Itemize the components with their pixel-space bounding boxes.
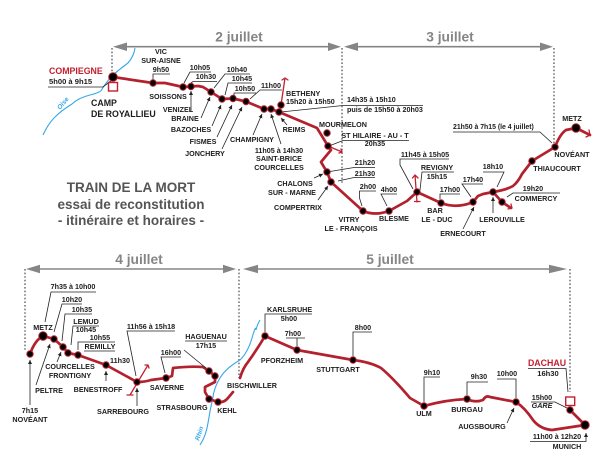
station: Fismes	[190, 95, 236, 146]
station: Augsbourg: 10h00	[497, 369, 517, 378]
station: Jonchery: JONCHERY	[185, 149, 225, 158]
station: Reims: 14h35 à 15h10	[347, 95, 396, 104]
station: Bénestroff: BENESTROFF	[74, 385, 123, 394]
station: Mourmelon	[319, 120, 367, 136]
station: Ernécourt: 17h40	[463, 175, 483, 184]
station: Châlons-sur-Marne: CHALONS	[277, 179, 313, 188]
station: Lérouville: 18h10	[483, 162, 503, 171]
station: Reims: REIMS	[283, 125, 306, 134]
station: Compertrix: COMPERTRIX	[274, 203, 322, 212]
station: Braine: BRAINE	[171, 114, 199, 123]
station: Haguenau	[184, 332, 227, 374]
station: Kehl: KEHL	[217, 406, 237, 415]
station: Burgau: 9h30	[471, 372, 487, 381]
station: Vic-sur-Aisne	[141, 47, 181, 86]
station: Thiaucourt: THIAUCOURT	[533, 164, 581, 173]
station: Compiègne	[48, 66, 117, 87]
camp de Royallieu: CAMP	[91, 98, 117, 108]
station: Lérouville: LEROUVILLE	[479, 215, 525, 224]
station: Remilly: REMILLY	[85, 342, 116, 351]
day arrow: 3 juillet: 3 juillet	[426, 30, 474, 44]
station: Vitry-le-François: 2h00	[360, 182, 376, 191]
station: Dachau gare: GARE	[532, 401, 553, 410]
station: Karlsruhe: KARLSRUHE	[267, 305, 312, 314]
station: Saverne	[150, 348, 184, 392]
station: Ulm: ULM	[416, 409, 432, 418]
station: Venizel: VENIZEL	[163, 105, 194, 114]
stop between Haguenau and Strasbourg	[212, 373, 218, 379]
day arrow: 2 juillet: 2 juillet	[215, 30, 263, 44]
station: Karlsruhe: 5h00	[281, 314, 297, 323]
station: Soissons	[149, 63, 211, 101]
station: Châlons-sur-Marne	[268, 158, 375, 197]
station: Lérouville	[479, 162, 525, 224]
station: Metz, 4 juillet: 7h35 à 10h00	[51, 282, 95, 291]
station: Blesme	[379, 185, 409, 223]
station: Remilly: 10h55	[90, 333, 110, 342]
station: Commercy: COMMERCY	[515, 194, 558, 203]
station: Stuttgart: STUTTGART	[316, 365, 360, 374]
station: Metz, 3 juillet	[562, 114, 590, 137]
station: Soissons: 10h05	[190, 63, 210, 72]
station: Peltre	[35, 295, 82, 395]
station: Bénestroff: 11h30	[110, 356, 130, 365]
day arrow: 5 juillet: 5 juillet	[366, 252, 414, 267]
destination: Dachau camp: DACHAU	[528, 358, 566, 368]
camp de Royallieu: DE ROYALLIEU	[91, 109, 156, 119]
station: Peltre: 10h20	[62, 295, 82, 304]
station: Fismes: FISMES	[190, 137, 217, 146]
route: Commercy branch	[493, 192, 511, 208]
station: Metz, 4 juillet: METZ	[33, 323, 53, 332]
station: Bazoches	[171, 74, 252, 134]
station: Braine: 10h40	[227, 65, 247, 74]
station: Champigny	[230, 81, 282, 144]
station: Novéant, 4 juillet	[12, 351, 48, 424]
station: Courcelles	[45, 305, 95, 371]
station: Champigny: CHAMPIGNY	[230, 135, 274, 144]
river: Rhin	[194, 320, 260, 445]
station: Novéant, 3 juillet: 21h50 à 7h15 (le 4 juillet)	[453, 124, 534, 131]
station: Jonchery: 10h50	[235, 84, 255, 93]
station: Blesme: 4h00	[381, 185, 397, 194]
station: Vitry-le-François: LE - FRANÇOIS	[324, 224, 378, 233]
day arrow: 3 juillet	[344, 30, 553, 51]
station: Revigny	[400, 150, 454, 202]
station: Sarrebourg	[97, 322, 175, 416]
station: Saint-Brice Courcelles: 11h05 à 14h30	[255, 146, 303, 155]
station: Reims: puis de 15h50 à 20h03	[347, 105, 423, 114]
station: Peltre: PELTRE	[35, 386, 63, 395]
station: St Hilaire-au-T	[325, 131, 409, 153]
station: Venizel: 10h30	[196, 72, 216, 81]
station: Jonchery	[185, 84, 256, 158]
station: Metz, 4 juillet	[33, 282, 96, 340]
station: Vitry-le-François: VITRY	[339, 215, 360, 224]
station: Bénestroff	[74, 356, 130, 394]
station: Kehl	[215, 399, 237, 415]
camp de Royallieu	[91, 82, 156, 119]
station: Ulm	[416, 368, 440, 418]
station: Stuttgart: 8h00	[355, 323, 371, 332]
station: Soissons: SOISSONS	[149, 92, 187, 101]
station: St Hilaire-au-T: 20h35	[365, 139, 385, 148]
station: Compiègne: COMPIEGNE	[49, 66, 103, 76]
station: Ulm: 9h10	[424, 368, 440, 377]
station: Venizel	[163, 72, 217, 114]
station: Novéant, 3 juillet: NOVÉANT	[554, 150, 590, 159]
station: Bétheny: BETHENY	[286, 89, 321, 98]
station: Stuttgart	[316, 323, 372, 374]
station: Compertrix	[274, 169, 375, 212]
station: Frontigny	[49, 350, 91, 380]
destination: Dachau camp: 16h30	[537, 369, 559, 378]
station: St Hilaire-au-T: ST HILAIRE - AU - T	[341, 131, 409, 140]
station: Compertrix: 21h30	[355, 169, 375, 178]
station: Frontigny: FRONTIGNY	[49, 371, 91, 380]
station: Remilly	[75, 333, 116, 358]
station: Courcelles: COURCELLES	[45, 362, 95, 371]
station: Vic-sur-Aisne: VIC	[155, 47, 167, 56]
station: Karlsruhe	[262, 305, 312, 339]
station: Saverne: SAVERNE	[150, 383, 184, 392]
station: Haguenau: 17h15	[196, 341, 216, 350]
title	[57, 180, 205, 228]
station: Pforzheim	[261, 329, 305, 365]
station: Châlons-sur-Marne: 21h20	[355, 158, 375, 167]
route: Bischwiller to Munich and Dachau	[240, 336, 585, 430]
station: Haguenau: HAGUENAU	[185, 332, 227, 341]
station: Dachau gare: 15h00	[532, 393, 552, 402]
station: Bazoches: 10h45	[232, 74, 252, 83]
station: Commercy: 19h20	[523, 184, 543, 193]
station: Augsbourg	[458, 369, 519, 431]
station: Strasbourg: STRASBOURG	[156, 403, 208, 412]
station: Lemud: 10h45	[76, 325, 96, 334]
title: essai de reconstitution	[57, 197, 205, 212]
station: Revigny: REVIGNY	[421, 163, 453, 172]
river: Rhin: Rhin	[194, 426, 205, 442]
station: Pforzheim: 7h00	[285, 329, 301, 338]
station: Vic-sur-Aisne: SUR-AISNE	[141, 56, 181, 65]
station: Dachau gare	[531, 393, 573, 413]
station: Thiaucourt	[529, 158, 581, 173]
station: Augsbourg: AUGSBOURG	[458, 422, 506, 431]
station: Commercy	[499, 184, 560, 209]
station: Saverne: 16h00	[161, 348, 181, 357]
station: Novéant, 3 juillet	[453, 124, 590, 159]
station: Sarrebourg: SARREBOURG	[97, 407, 149, 416]
station: Bétheny	[278, 78, 335, 108]
station: Strasbourg	[156, 396, 212, 412]
station: Ernécourt	[440, 175, 486, 238]
station: Bar-le-Duc: LE - DUC	[421, 215, 453, 224]
station: Bar-le-Duc: 17h00	[440, 185, 460, 194]
station: Vitry-le-François	[324, 182, 378, 233]
station: Revigny: 15h15	[427, 172, 447, 181]
station: Reims	[276, 95, 423, 134]
station: Saint-Brice Courcelles	[254, 106, 304, 172]
station: Courcelles: 10h35	[72, 305, 92, 314]
route: Novéant to Kehl	[30, 336, 233, 402]
destination: Dachau camp	[528, 358, 575, 406]
station: Blesme: BLESME	[379, 214, 409, 223]
route: Compiègne to Metz	[113, 77, 590, 214]
station: Burgau: BURGAU	[451, 405, 483, 414]
station: Mourmelon: MOURMELON	[319, 120, 367, 129]
station: Novéant, 4 juillet: 7h15	[22, 406, 38, 415]
station: Compiègne: 5h00 à 9h15	[49, 77, 93, 86]
station: Bazoches: BAZOCHES	[171, 125, 211, 134]
station: Champigny: 11h00	[261, 81, 281, 90]
station: Châlons-sur-Marne: SUR - MARNE	[268, 188, 316, 197]
station: Novéant, 4 juillet: NOVÉANT	[12, 415, 48, 424]
station: Pforzheim: PFORZHEIM	[261, 356, 303, 365]
station: Lemud: LEMUD	[73, 317, 99, 326]
station: Saint-Brice Courcelles: SAINT-BRICE	[256, 154, 302, 163]
station: Braine	[171, 65, 250, 123]
title: - itinéraire et horaires -	[58, 213, 204, 228]
station: Lemud	[71, 317, 99, 345]
day arrow: 4 juillet	[26, 252, 236, 273]
station: Bar-le-Duc	[421, 185, 460, 224]
station: Munich: 11h00 à 12h20	[533, 432, 581, 441]
station: Sarrebourg: 11h56 à 15h18	[127, 322, 175, 331]
day arrow: 5 juillet	[243, 252, 567, 273]
station: Bar-le-Duc: BAR	[427, 206, 444, 215]
station: Metz, 3 juillet: METZ	[562, 114, 582, 123]
station: Bischwiller: BISCHWILLER	[227, 381, 278, 390]
station: Burgau	[451, 372, 488, 414]
day arrow: 2 juillet	[113, 30, 341, 51]
station: Bétheny: 15h20 à 15h50	[286, 97, 335, 106]
station: Revigny: 11h45 à 15h05	[401, 150, 449, 159]
station: Munich: MUNICH	[553, 442, 581, 451]
station: Saint-Brice Courcelles: COURCELLES	[254, 163, 304, 172]
station: Munich	[530, 421, 589, 451]
title: TRAIN DE LA MORT	[67, 180, 196, 195]
station: Vic-sur-Aisne: 9h50	[153, 65, 169, 74]
river: Oise: Oise	[56, 96, 71, 111]
river: Oise	[43, 48, 135, 135]
station: Ernécourt: ERNECOURT	[440, 229, 486, 238]
day arrow: 4 juillet: 4 juillet	[115, 252, 163, 267]
